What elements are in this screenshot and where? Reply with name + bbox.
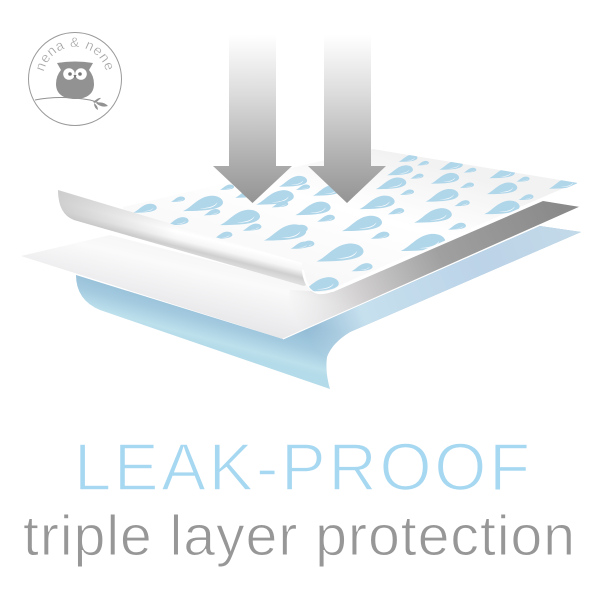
arrow: right downward [308,35,386,203]
logo wordmark: nena & nene [37,38,112,71]
logo: nena & nene owl badge [28,32,122,126]
icon: owl [56,62,94,99]
curled front edge of top sheet [58,190,306,286]
layer 3: blue waterproof backing [76,226,581,389]
icon: branch [35,98,108,110]
heading: LEAK-PROOF: LEAK-PROOF [74,430,530,505]
arrow: left downward [213,35,292,203]
layer 2: white sheet with grey shaded edge [21,201,580,339]
water drop pattern [133,155,577,292]
layer 1: top sheet with water drop pattern [58,149,578,293]
subheading: triple layer protection: triple layer protection [23,504,575,568]
